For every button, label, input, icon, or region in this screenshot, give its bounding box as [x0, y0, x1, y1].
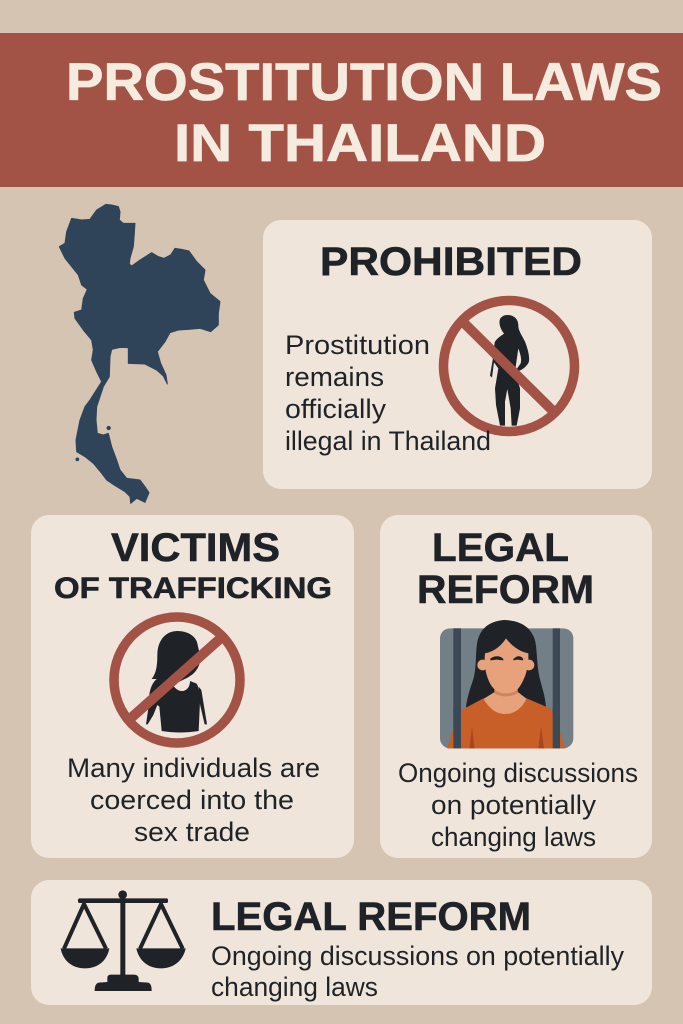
body text: legal reform banner: changing laws — [211, 972, 378, 1002]
heading: prohibited: PROHIBITED — [320, 240, 582, 284]
heading: legal reform: REFORM — [417, 568, 594, 612]
icon: woman behind bars — [440, 620, 573, 748]
title: IN THAILAND — [174, 114, 546, 173]
panel: legal reform banner — [31, 880, 652, 1005]
body text: prohibited: Prostitution — [285, 330, 430, 360]
body text: victims: Many individuals are — [67, 753, 320, 783]
body text: legal reform card: Ongoing discussions — [398, 758, 638, 788]
icon: scales of justice — [61, 890, 186, 991]
map of Thailand — [59, 204, 220, 503]
body text: prohibited: illegal in Thailand — [285, 426, 491, 456]
body text: prohibited — [285, 330, 491, 456]
heading: legal reform: LEGAL — [432, 526, 569, 570]
body text: legal reform card — [398, 758, 638, 852]
heading: legal reform — [417, 526, 594, 612]
title banner — [0, 33, 683, 187]
title — [66, 53, 662, 173]
title: PROSTITUTION LAWS — [66, 53, 662, 112]
heading: victims of trafficking: VICTIMS — [111, 526, 280, 570]
body text: legal reform card: changing laws — [431, 822, 596, 852]
icon: no-entry sign over woman bust — [114, 617, 240, 743]
body text: prohibited: officially — [285, 394, 387, 424]
panel: victims of trafficking — [31, 515, 354, 858]
body text: legal reform banner — [211, 941, 624, 1002]
panel: legal reform card — [380, 515, 652, 858]
heading: victims of trafficking — [54, 526, 332, 605]
heading: victims of trafficking: OF TRAFFICKING — [54, 572, 332, 605]
body text: prohibited: remains — [285, 362, 384, 392]
body text: legal reform card: on potentially — [431, 790, 597, 820]
icon: no-entry sign over female silhouette — [444, 300, 574, 432]
body text: victims: sex trade — [134, 817, 250, 847]
body text: legal reform banner: Ongoing discussions on potentially — [211, 941, 624, 971]
body text: victims — [67, 753, 320, 847]
heading: legal reform banner: LEGAL REFORM — [211, 895, 531, 939]
panel: prohibited — [263, 220, 652, 489]
body text: victims: coerced into the — [90, 785, 294, 815]
